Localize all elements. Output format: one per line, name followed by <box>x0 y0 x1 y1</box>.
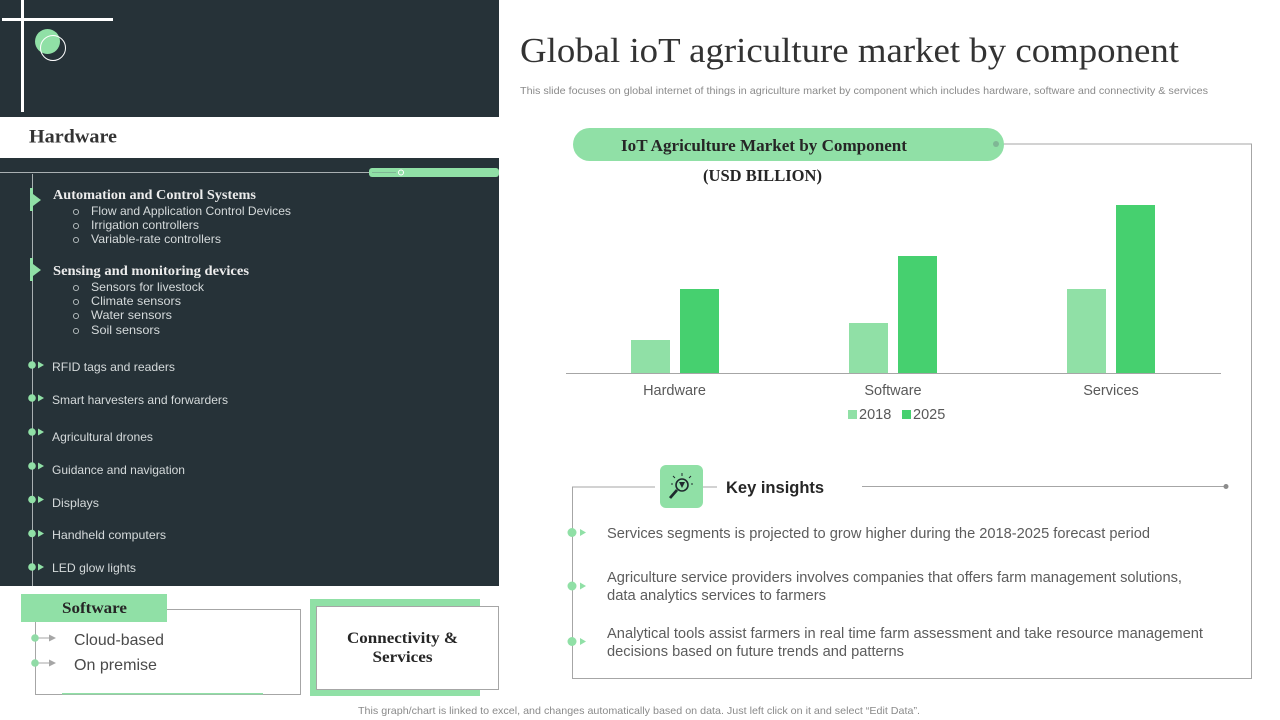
automation group: Flow and Application Control Devices <box>91 204 291 218</box>
hardware list: Smart harvesters and forwarders <box>52 393 228 407</box>
key insights heading: Key insights <box>726 479 824 497</box>
insight 2: Agriculture service providers involves companies that offers farm management solutions, <box>607 569 1182 586</box>
panel: software <box>21 594 300 694</box>
insight 1: Services segments is projected to grow higher during the 2018-2025 forecast period <box>607 525 1150 542</box>
chart heading pill <box>573 128 1004 161</box>
insight 3: decisions based on future trends and patterns <box>607 643 904 660</box>
panel: software: Cloud-based <box>74 632 164 649</box>
subtitle: This slide focuses on global internet of things in agriculture market by component which includes hardware, software and connectivity & services <box>520 85 1208 97</box>
key insights rule <box>862 484 1228 489</box>
hardware list: Handheld computers <box>52 528 166 542</box>
sensing group: Soil sensors <box>91 323 160 337</box>
title: Global ioT agriculture market by component <box>520 31 1179 70</box>
sensing group <box>30 258 249 337</box>
panel: connectivity and services: Services <box>372 649 432 666</box>
bar chart: Software <box>864 383 922 399</box>
sensing group: Sensing and monitoring devices <box>53 263 249 278</box>
bar chart: Hardware <box>643 383 706 399</box>
footer note: This graph/chart is linked to excel, and changes automatically based on data. Just left click on it and select “Edit Data”. <box>358 705 920 717</box>
insight 3 <box>568 625 1204 660</box>
insight 2: data analytics services to farmers <box>607 587 826 604</box>
panel: connectivity and services: Connectivity & <box>347 630 458 647</box>
decorative cross and circles <box>2 0 113 112</box>
sensing group: Climate sensors <box>91 294 181 308</box>
panel: connectivity and services <box>310 599 498 696</box>
hardware heading band: Hardware <box>29 126 117 148</box>
chart legend: 2025 <box>913 407 945 423</box>
automation group: Irrigation controllers <box>91 218 199 232</box>
automation group: Variable-rate controllers <box>91 232 221 246</box>
chart legend: 2018 <box>859 407 891 423</box>
automation group: Automation and Control Systems <box>53 187 256 202</box>
hardware list: LED glow lights <box>52 561 136 575</box>
panel: software: Software <box>62 600 127 617</box>
bar chart: Services <box>1083 383 1139 399</box>
hardware list: Guidance and navigation <box>52 463 185 477</box>
insight 2 <box>568 569 1182 604</box>
timeline line <box>32 174 33 586</box>
insight 3: Analytical tools assist farmers in real time farm assessment and take resource management <box>607 625 1204 642</box>
sensing group: Water sensors <box>91 308 172 322</box>
panel: hardware <box>0 0 499 586</box>
automation group <box>30 187 291 246</box>
hardware heading band <box>0 117 499 158</box>
chart heading pill: IoT Agriculture Market by Component <box>621 136 907 155</box>
hardware list: RFID tags and readers <box>52 360 175 374</box>
hardware list: Displays <box>52 496 99 510</box>
hardware list <box>28 360 228 575</box>
sensing group: Sensors for livestock <box>91 280 205 294</box>
divider with green pill <box>0 168 499 177</box>
hardware list: Agricultural drones <box>52 430 153 444</box>
chart legend <box>848 407 945 423</box>
icon: key insights <box>660 465 703 508</box>
bar chart <box>566 205 1221 423</box>
panel: software: On premise <box>74 657 157 674</box>
chart unit label: (USD BILLION) <box>703 166 822 185</box>
chart frame <box>572 144 1252 678</box>
